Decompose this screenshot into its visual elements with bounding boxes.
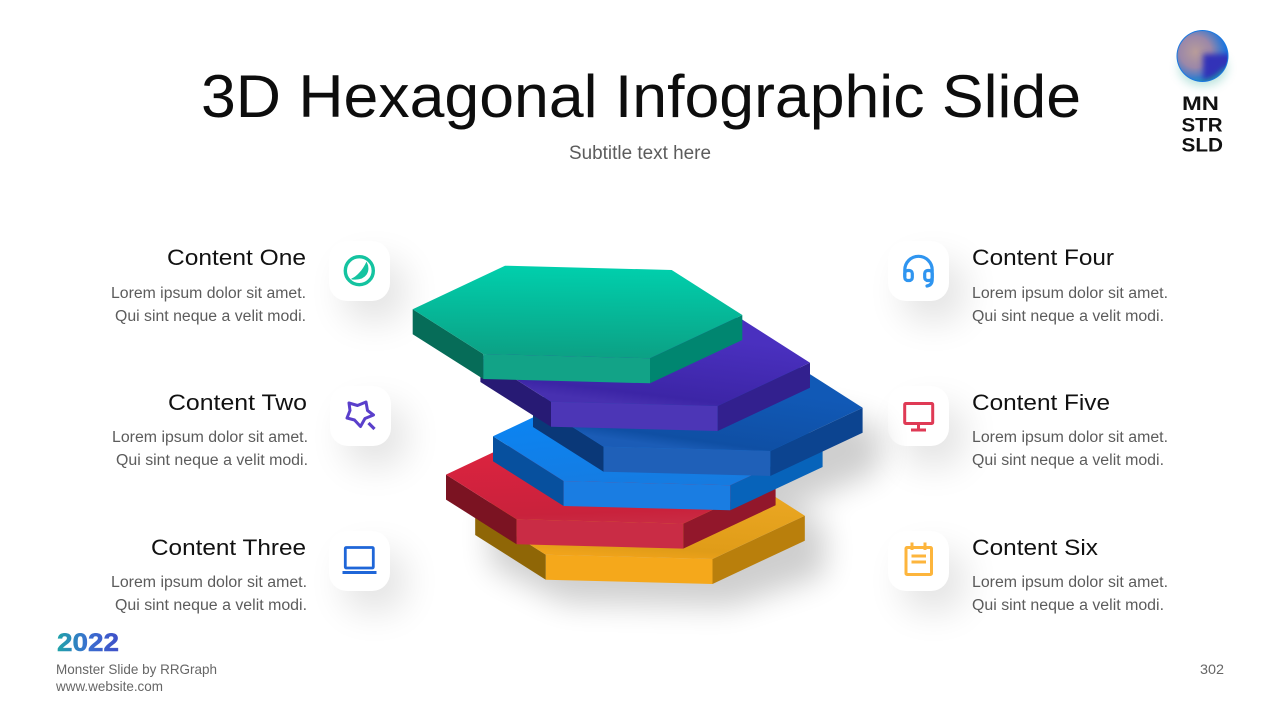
icon card: crescent (329, 241, 405, 321)
logo wordmark: SLD (1182, 136, 1223, 156)
logo wordmark: STR (1182, 116, 1223, 136)
heading: Content Three (151, 535, 306, 560)
text block: Qui sint neque a velit modi. (972, 597, 1164, 614)
text block (972, 574, 1168, 614)
panel: right item six (888, 531, 1168, 614)
text block (111, 574, 307, 614)
layer: green hexagon (413, 266, 742, 383)
icon card: magic star (330, 386, 406, 466)
icon card: laptop (329, 531, 405, 611)
panel: left item three (111, 531, 405, 614)
text block: Qui sint neque a velit modi. (115, 597, 307, 614)
chart: 3D hexagon stack (413, 266, 880, 607)
panel: left item two (112, 386, 406, 469)
title: 3D Hexagonal Infographic Slide (201, 63, 1081, 130)
text block: Qui sint neque a velit modi. (116, 452, 308, 469)
text block (111, 285, 306, 325)
layer: dark blue hexagon (533, 358, 863, 476)
text block (972, 429, 1168, 469)
text block: Qui sint neque a velit modi. (115, 308, 306, 325)
footer: credit: Monster Slide by RRGraph (56, 661, 217, 677)
layer: yellow hexagon (475, 466, 805, 584)
text block (972, 285, 1168, 325)
panel: left item one (111, 241, 405, 325)
heading: Content Five (972, 390, 1110, 415)
icon card: headset (888, 241, 964, 321)
logo wordmark: MN (1182, 94, 1219, 115)
panel: right item five (888, 386, 1168, 469)
logo wordmark (1182, 94, 1223, 156)
text block: Lorem ipsum dolor sit amet. (111, 285, 306, 302)
text block: Lorem ipsum dolor sit amet. (111, 574, 307, 591)
text block (112, 429, 308, 469)
footer: year: 2022 (57, 629, 119, 657)
layer: bright blue hexagon (493, 393, 823, 510)
footer: website: www.website.com (55, 678, 163, 694)
heading: Content Six (972, 535, 1098, 560)
heading: Content One (167, 245, 306, 270)
text block: Lorem ipsum dolor sit amet. (972, 429, 1168, 446)
page number: 302 (1200, 661, 1224, 677)
text block: Lorem ipsum dolor sit amet. (972, 574, 1168, 591)
heading: Content Two (168, 390, 307, 415)
panel: right item four (888, 241, 1168, 325)
layer: purple hexagon (480, 313, 810, 431)
icon: logo orb (1176, 30, 1232, 90)
shadow: stack (490, 385, 880, 607)
icon card: notepad (888, 531, 964, 611)
icon card: monitor (888, 386, 964, 466)
text block: Qui sint neque a velit modi. (972, 308, 1164, 325)
text block: Lorem ipsum dolor sit amet. (112, 429, 308, 446)
text block: Lorem ipsum dolor sit amet. (972, 285, 1168, 302)
subtitle: Subtitle text here (569, 143, 711, 164)
heading: Content Four (972, 245, 1114, 270)
layer: red hexagon (446, 431, 776, 549)
logo: MNSTRSLD (1176, 30, 1232, 156)
text block: Qui sint neque a velit modi. (972, 452, 1164, 469)
